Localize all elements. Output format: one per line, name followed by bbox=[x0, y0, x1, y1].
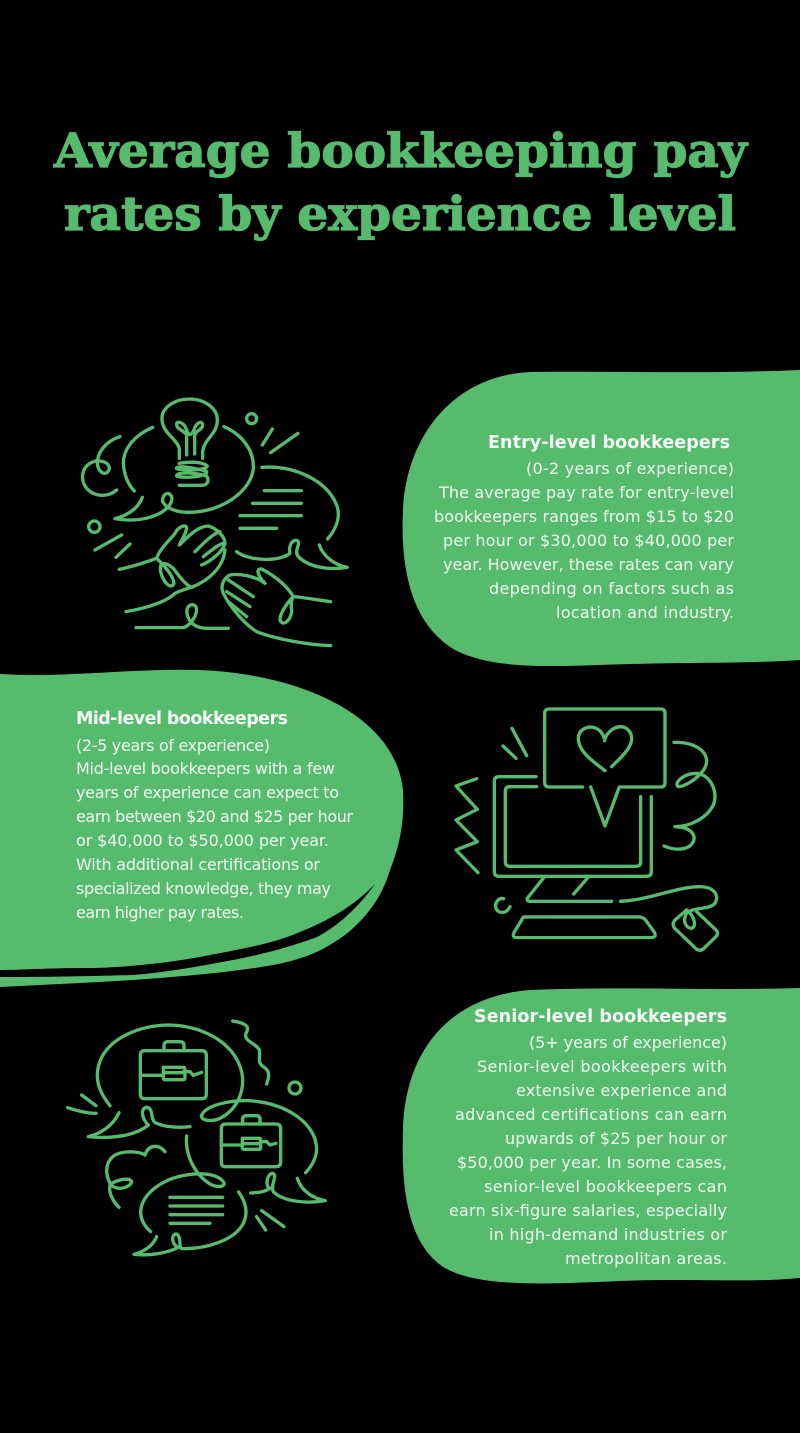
body text bbox=[76, 736, 353, 922]
body text: Mid-level bookkeepers with a few bbox=[76, 759, 335, 778]
panel shape bbox=[403, 370, 800, 666]
icon: light bulb, speech bubbles and hands bbox=[83, 399, 347, 646]
icon: speech bubbles with briefcases bbox=[68, 1021, 325, 1255]
body text: in high-demand industries or bbox=[489, 1225, 727, 1244]
body text: specialized knowledge, they may bbox=[76, 879, 331, 898]
panel shape bbox=[403, 988, 800, 1283]
body text: earn higher pay rates. bbox=[76, 903, 244, 922]
body text: extensive experience and bbox=[516, 1081, 727, 1100]
heading: Senior-level bookkeepers bbox=[474, 1007, 727, 1027]
body text: $50,000 per year. In some cases, bbox=[457, 1153, 727, 1172]
icon: computer with heart speech bubble and mouse bbox=[456, 709, 717, 950]
body text: Senior-level bookkeepers with bbox=[477, 1057, 727, 1076]
title: rates by experience level bbox=[64, 187, 736, 242]
body text: or $40,000 to $50,000 per year. bbox=[76, 831, 329, 850]
body text: (5+ years of experience) bbox=[529, 1033, 727, 1052]
body text: years of experience can expect to bbox=[76, 783, 339, 802]
panel: senior-level bookkeepers bbox=[403, 988, 800, 1283]
body text: upwards of $25 per hour or bbox=[505, 1129, 727, 1148]
body text: earn six-figure salaries, especially bbox=[449, 1201, 727, 1220]
body text: earn between $20 and $25 per hour bbox=[76, 807, 353, 826]
body text: per hour or $30,000 to $40,000 per bbox=[443, 531, 734, 550]
body text: The average pay rate for entry-level bbox=[438, 483, 734, 502]
body text: advanced certifications can earn bbox=[455, 1105, 727, 1124]
body text: metropolitan areas. bbox=[565, 1249, 727, 1268]
panel shape bbox=[0, 670, 403, 987]
body text: senior-level bookkeepers can bbox=[484, 1177, 727, 1196]
title: Average bookkeeping pay bbox=[53, 124, 749, 179]
body text: location and industry. bbox=[556, 603, 734, 622]
body text: bookkeepers ranges from $15 to $20 bbox=[434, 507, 734, 526]
body text: year. However, these rates can vary bbox=[443, 555, 734, 574]
body text: (2-5 years of experience) bbox=[76, 736, 270, 755]
panel: mid-level bookkeepers bbox=[0, 670, 403, 987]
title bbox=[53, 124, 749, 242]
body text: depending on factors such as bbox=[489, 579, 734, 598]
body text: (0-2 years of experience) bbox=[526, 459, 734, 478]
body text bbox=[434, 459, 734, 622]
panel: entry-level bookkeepers bbox=[403, 370, 800, 666]
body text bbox=[449, 1033, 727, 1268]
heading: Mid-level bookkeepers bbox=[76, 709, 288, 729]
heading: Entry-level bookkeepers bbox=[488, 433, 730, 453]
body text: With additional certifications or bbox=[76, 855, 320, 874]
